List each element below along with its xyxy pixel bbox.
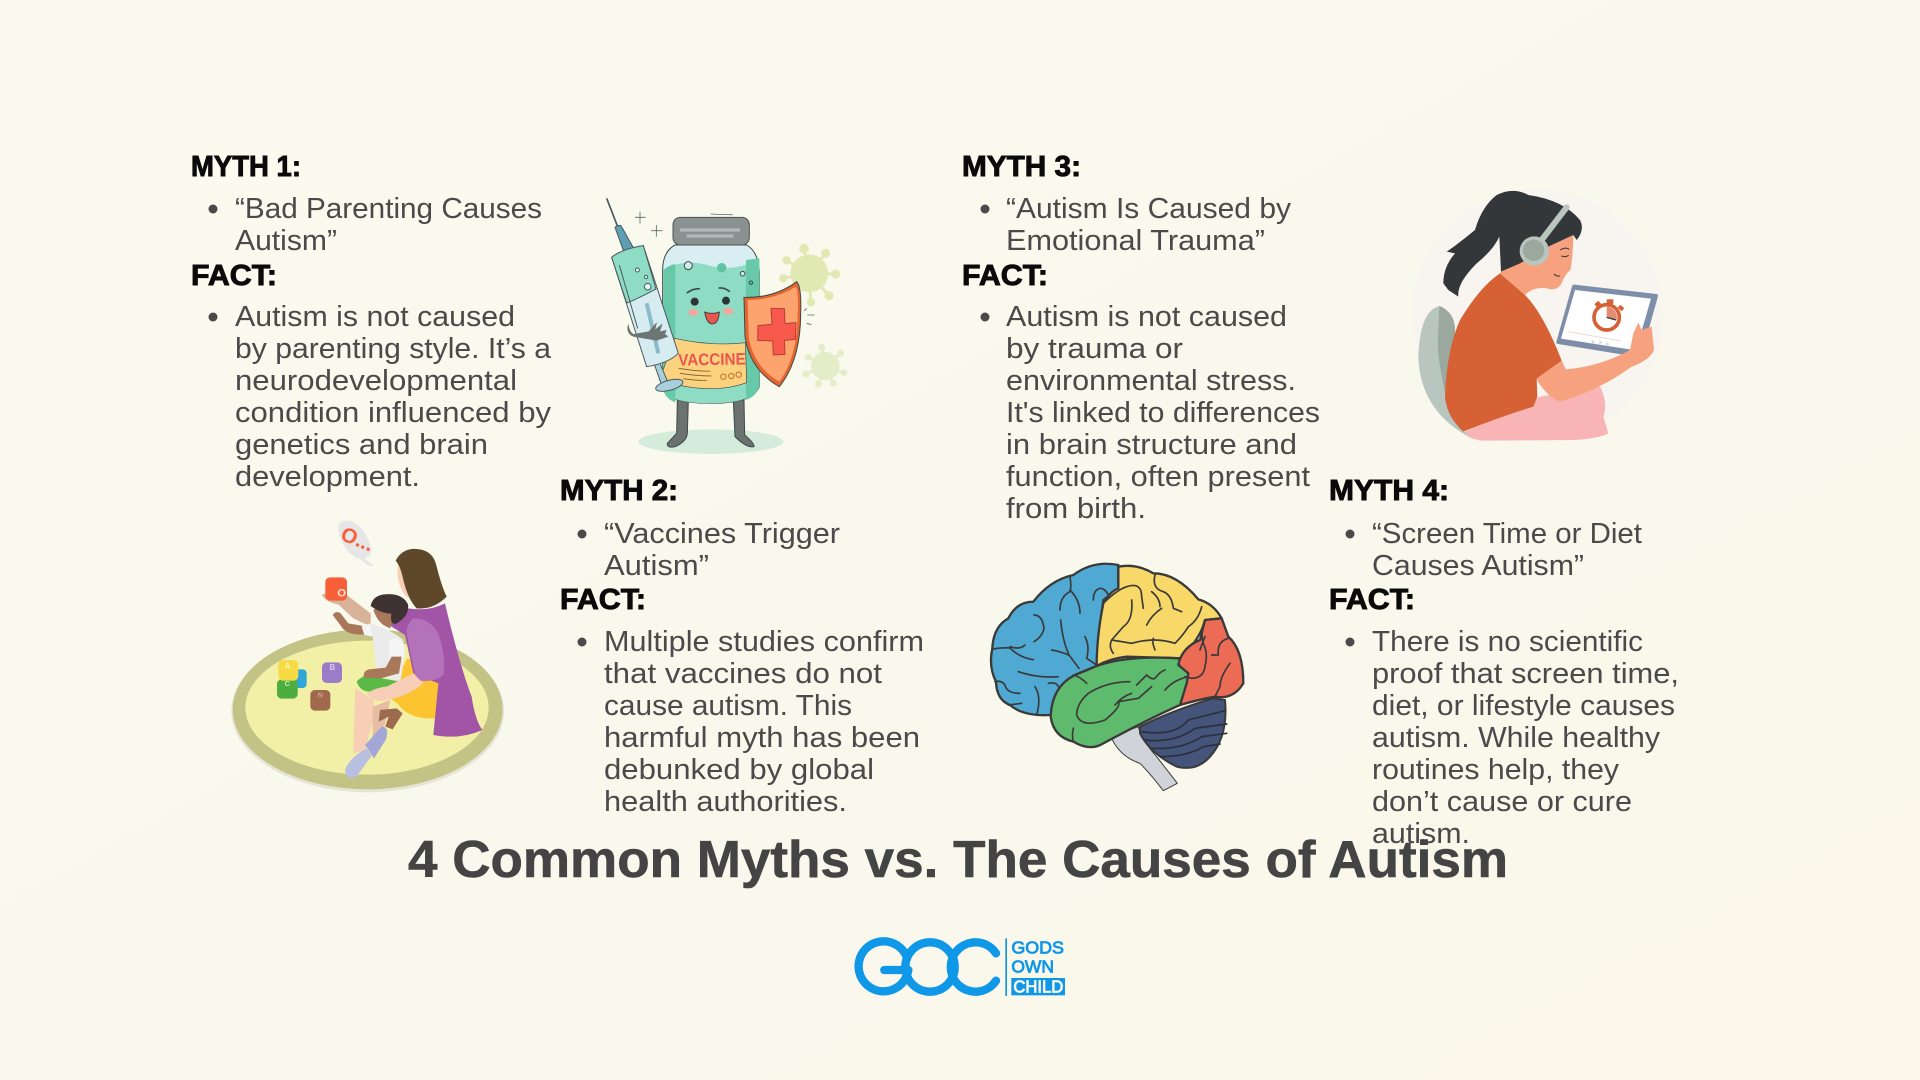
- mother's far arm holding block: [322, 592, 371, 627]
- fact 1 text: neurodevelopmental: [235, 365, 517, 397]
- fact 3 text: [980, 301, 1320, 525]
- fact 4 text: [1346, 626, 1679, 850]
- mother's hair and face: [396, 549, 447, 609]
- eye and smile: [1554, 248, 1569, 276]
- toy blocks: B: [329, 663, 335, 672]
- speech bubble: O...: [337, 523, 377, 556]
- fact 3 text: Autism is not caused: [1006, 301, 1287, 333]
- heading: fact 2: FACT:: [560, 584, 646, 616]
- panel: myth 2: [560, 475, 924, 818]
- logo divider: [1005, 938, 1007, 996]
- logo wordmark: GODS: [1011, 937, 1064, 957]
- panel: myth 3: [962, 151, 1320, 525]
- myth 3 statement: “Autism Is Caused by: [1006, 193, 1292, 225]
- red block: O: [337, 588, 346, 600]
- cerebellum: [1140, 698, 1227, 768]
- frontal lobe: [991, 564, 1118, 715]
- fact 3 text: function, often present: [1006, 461, 1310, 493]
- fact 3 text: environmental stress.: [1006, 365, 1296, 397]
- myth 3 statement: [980, 193, 1292, 257]
- myth 1 statement: [208, 193, 542, 257]
- red block: [322, 577, 347, 601]
- background circle: [1411, 189, 1663, 441]
- mother's sleeve: [407, 618, 444, 681]
- fact 1 text: Autism is not caused: [235, 301, 515, 333]
- heading: myth 4: MYTH 4:: [1329, 475, 1449, 507]
- fact 1 text: condition influenced by: [235, 397, 552, 429]
- bottle body: [663, 245, 759, 403]
- fact 4 text: autism. While healthy: [1372, 722, 1661, 754]
- myth 4 statement: Causes Autism”: [1372, 550, 1584, 582]
- fact 2 text: debunked by global: [604, 754, 874, 786]
- myth 4 statement: [1346, 518, 1642, 582]
- fact 1 text: genetics and brain: [235, 429, 488, 461]
- heading: fact 3: FACT:: [962, 260, 1048, 292]
- logo wordmark: CHILD: [1013, 977, 1063, 997]
- yellow cushion: [387, 658, 439, 718]
- stopwatch: [1568, 299, 1624, 345]
- label: [659, 338, 747, 389]
- myth 4 statement: “Screen Time or Diet: [1372, 518, 1642, 550]
- illustration: labelled-colour brain: [991, 564, 1243, 791]
- fact 1 text: [208, 301, 552, 493]
- toy blocks: N: [318, 690, 323, 699]
- fact 2 text: cause autism. This: [604, 690, 852, 722]
- gripping hand: [627, 322, 668, 341]
- main title: 4 Common Myths vs. The Causes of Autism: [408, 831, 1508, 889]
- temporal lobe: [1051, 658, 1188, 747]
- fact 3 text: in brain structure and: [1006, 429, 1297, 461]
- fact 2 text: [578, 626, 924, 818]
- fact 3 text: from birth.: [1006, 493, 1146, 525]
- illustration: mother and child playing with blocks: [231, 521, 504, 792]
- myth 1 statement: Autism”: [235, 225, 337, 257]
- fact 2 text: that vaccines do not: [604, 658, 882, 690]
- myth 2 statement: Autism”: [604, 550, 709, 582]
- face: [687, 288, 733, 324]
- sparkles: [635, 212, 815, 325]
- play mat: [231, 629, 504, 792]
- mother's dress: [390, 603, 482, 737]
- toy blocks: C: [285, 679, 291, 688]
- occipital lobe: [1178, 618, 1243, 705]
- headset: [1520, 207, 1567, 266]
- panel: myth 4: [1329, 475, 1679, 850]
- heading: fact 1: FACT:: [191, 260, 277, 292]
- toy blocks: A: [285, 661, 291, 670]
- myth 2 statement: “Vaccines Trigger: [604, 518, 840, 550]
- arm and hand: [1536, 323, 1654, 402]
- fact 1 text: by parenting style. It’s a: [235, 333, 552, 365]
- logo mark: [859, 941, 996, 992]
- fact 4 text: diet, or lifestyle causes: [1372, 690, 1675, 722]
- fact 4 text: autism.: [1372, 818, 1470, 850]
- illustration: girl with headset looking at tablet: [1411, 189, 1663, 441]
- fact 3 text: It's linked to differences: [1006, 397, 1320, 429]
- background viruses: [779, 244, 847, 387]
- fact 4 text: There is no scientific: [1372, 626, 1643, 658]
- chair: [1418, 306, 1475, 440]
- fact 4 text: proof that screen time,: [1372, 658, 1679, 690]
- fact 1 text: development.: [235, 461, 420, 493]
- child's shorts: [357, 676, 400, 697]
- fact 2 text: health authorities.: [604, 786, 847, 818]
- t-shirt: [1445, 273, 1562, 432]
- fact 2 text: harmful myth has been: [604, 722, 920, 754]
- fact 4 text: don’t cause or cure: [1372, 786, 1632, 818]
- child's body and arms: [333, 612, 405, 682]
- myth 2 statement: [578, 518, 840, 582]
- heading: fact 4: FACT:: [1329, 584, 1415, 616]
- brain folds: [993, 575, 1230, 742]
- hair: [1443, 191, 1582, 297]
- toy blocks: [277, 660, 342, 711]
- heading: myth 2: MYTH 2:: [560, 475, 678, 507]
- myth 1 statement: “Bad Parenting Causes: [235, 193, 542, 225]
- label: VACCINE: [678, 349, 746, 370]
- face and neck: [1500, 235, 1573, 295]
- tablet: [1558, 287, 1656, 355]
- mother's legs: [353, 688, 390, 753]
- fact 2 text: Multiple studies confirm: [604, 626, 924, 658]
- bottle lid: [673, 217, 749, 245]
- logo wordmark: OWN: [1011, 956, 1054, 976]
- legs: [667, 400, 754, 447]
- parietal lobe: [1097, 566, 1222, 666]
- myth 3 statement: Emotional Trauma”: [1006, 225, 1265, 257]
- brain stem: [1112, 727, 1177, 791]
- shield: [744, 282, 801, 387]
- mother's near arm: [367, 673, 423, 701]
- child's legs: [379, 708, 403, 729]
- logo wordmark: [1011, 937, 1065, 997]
- heading: myth 1: MYTH 1:: [191, 151, 301, 183]
- heading: myth 3: MYTH 3:: [962, 151, 1081, 183]
- logo: Gods Own Child: [859, 937, 1065, 997]
- child's head: [371, 594, 408, 628]
- fact 3 text: by trauma or: [1006, 333, 1183, 365]
- panel: myth 1: [191, 151, 552, 493]
- mother's shoes: [345, 727, 387, 778]
- syringe: [607, 198, 684, 394]
- fact 4 text: routines help, they: [1372, 754, 1620, 786]
- ground shadow: [639, 429, 783, 454]
- illustration: cartoon vaccine bottle with syringe and shield: [607, 198, 847, 454]
- trousers: [1465, 387, 1608, 441]
